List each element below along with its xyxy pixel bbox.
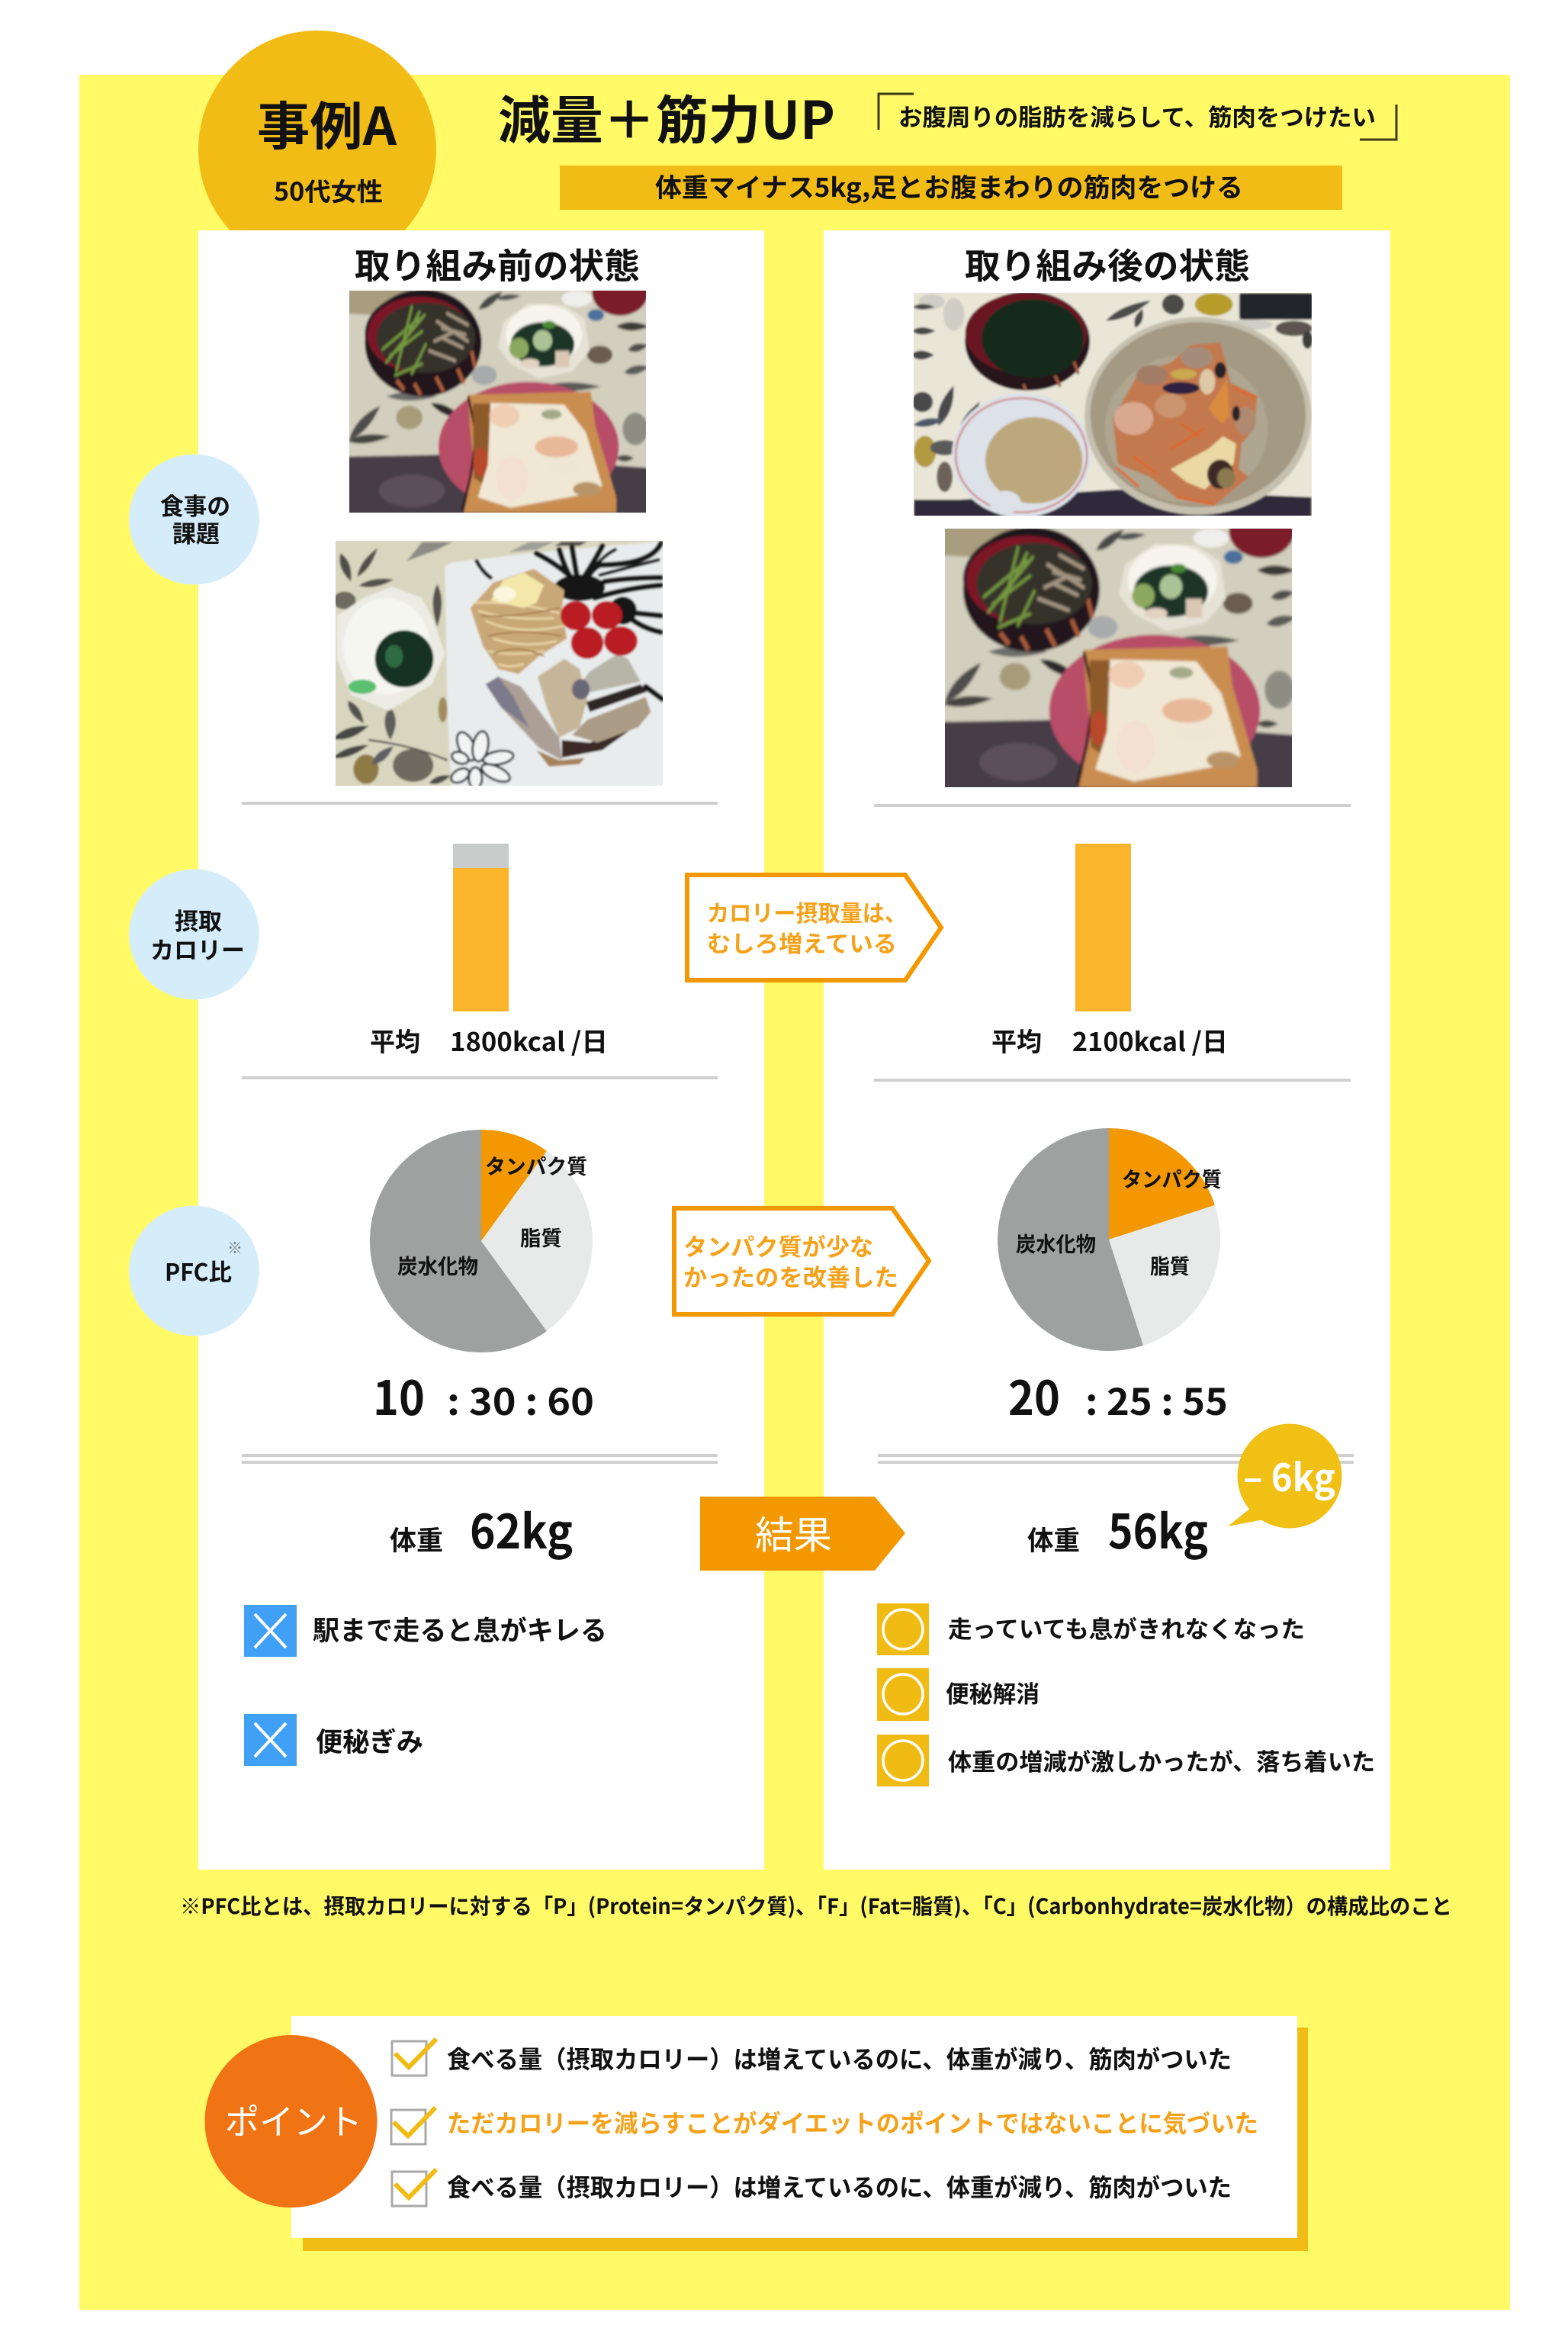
panel: after [824,230,1390,1870]
callout arrow: protein: タンパク質が少な [683,1228,873,1262]
weight: after [1027,1494,1208,1562]
bar chart: before calories [453,844,509,1011]
calorie label: before [370,1021,608,1059]
row label: calorie intake [129,870,259,999]
row label: meal issues: 課題 [172,515,220,549]
issue before: short of breath: 駅まで走ると息がキレる [313,1609,607,1648]
calorie label: before: 1800kcal /日 [450,1021,608,1059]
result after: constipation resolved: 便秘解消 [946,1675,1039,1709]
calorie label: after [991,1021,1228,1059]
callout arrow: protein: かったのを改善した [683,1259,898,1293]
point item 1: 食べる量（摂取カロリー）は増えているのに、体重が減り、筋肉がついた [447,2040,1232,2076]
callout arrow: protein [674,1208,929,1314]
weight: before: 62kg [470,1494,573,1562]
row label: calorie intake: 摂取 [175,902,222,937]
heading: before: 取り組み前の状態 [355,239,640,289]
result after: constipation resolved [877,1668,1039,1721]
photo: before meal 2 [336,541,663,786]
row label: PFC ratio: PFC比 [165,1253,232,1288]
calorie label: after: 2100kcal /日 [1072,1021,1228,1059]
photo: after meal 1 [914,293,1312,516]
PFC ratio: before [373,1360,594,1429]
weight: after: 体重 [1027,1519,1080,1558]
PFC ratio: after: 20 [1008,1360,1060,1429]
PFC ratio: after: : 25 : 55 [1085,1372,1228,1426]
goal bar: 体重マイナス5kg,足とお腹まわりの筋肉をつける [655,167,1243,204]
pie chart: after PFC: 脂質 [1150,1250,1190,1280]
calorie label: after: 平均 [991,1021,1042,1059]
row label: PFC ratio: ※ [227,1236,243,1258]
quote in brackets: お腹周りの脂肪を減らして、筋肉をつけたい [898,98,1376,133]
issue before: constipation [244,1714,423,1766]
pie chart: after PFC: 炭水化物 [1016,1228,1096,1258]
bar chart: after calories [1075,844,1131,1011]
footnote: ※PFC比とは、摂取カロリーに対する「P」(Protein=タンパク質)、「F」(Fat=脂質)、「C」(Carbonhydrate=炭水化物）の構成比のこと [180,1890,1452,1921]
badge circle: case A [198,31,436,269]
pie chart: after PFC: タンパク質 [1122,1163,1222,1193]
callout arrow: calories: むしろ増えている [707,925,897,959]
photo: before meal 1 [349,291,646,513]
heading: after: 取り組み後の状態 [965,239,1250,289]
point panel [291,2016,1297,2238]
speech bubble: minus 6kg: – 6kg [1243,1448,1335,1503]
result arrow [700,1497,905,1571]
point panel shadow [303,2028,1308,2251]
quote in brackets [879,94,1396,140]
weight: before: 体重 [390,1519,443,1558]
row label: meal issues [129,455,259,584]
result after: breathing [877,1603,1305,1655]
PFC ratio: before: 10 [373,1360,425,1429]
weight: after: 56kg [1108,1494,1208,1562]
badge circle: case A: 事例A [257,85,397,160]
PFC ratio: before: : 30 : 60 [447,1372,594,1426]
title: 減量＋筋力UP [498,79,835,154]
pie chart: before PFC: 炭水化物 [397,1250,478,1280]
calorie label: before: 平均 [370,1021,420,1059]
weight: before [390,1494,573,1562]
issue before: constipation: 便秘ぎみ [316,1721,423,1760]
pie chart: after PFC [998,1128,1222,1351]
row label: meal issues: 食事の [160,487,230,522]
row label: calorie intake: カロリー [150,931,245,966]
panel: before [198,230,764,1870]
issue before: short of breath [244,1605,607,1657]
point circle: ポイント [225,2095,362,2145]
pie chart: before PFC [370,1130,593,1352]
pie chart: before PFC: 脂質 [520,1222,562,1252]
PFC ratio: after [1008,1360,1228,1429]
row label: PFC ratio [129,1205,259,1336]
point item 3: 食べる量（摂取カロリー）は増えているのに、体重が減り、筋肉がついた [447,2169,1232,2204]
point circle [204,2035,377,2208]
callout arrow: calories: カロリー摂取量は、 [707,895,907,928]
pie chart: before PFC: タンパク質 [485,1150,587,1180]
result arrow: 結果 [755,1505,832,1560]
point item 2: ただカロリーを減らすことがダイエットのポイントではないことに気づいた [447,2105,1258,2140]
result after: weight stable: 体重の増減が激しかったが、落ち着いた [948,1743,1375,1777]
result after: weight stable [877,1735,1375,1786]
photo: after meal 2 [945,529,1292,787]
badge circle: case A: 50代女性 [274,172,383,208]
goal bar [560,166,1342,210]
callout arrow: calories [687,875,941,980]
result after: breathing: 走っていても息がきれなくなった [948,1610,1305,1645]
speech bubble: minus 6kg [1228,1423,1342,1529]
